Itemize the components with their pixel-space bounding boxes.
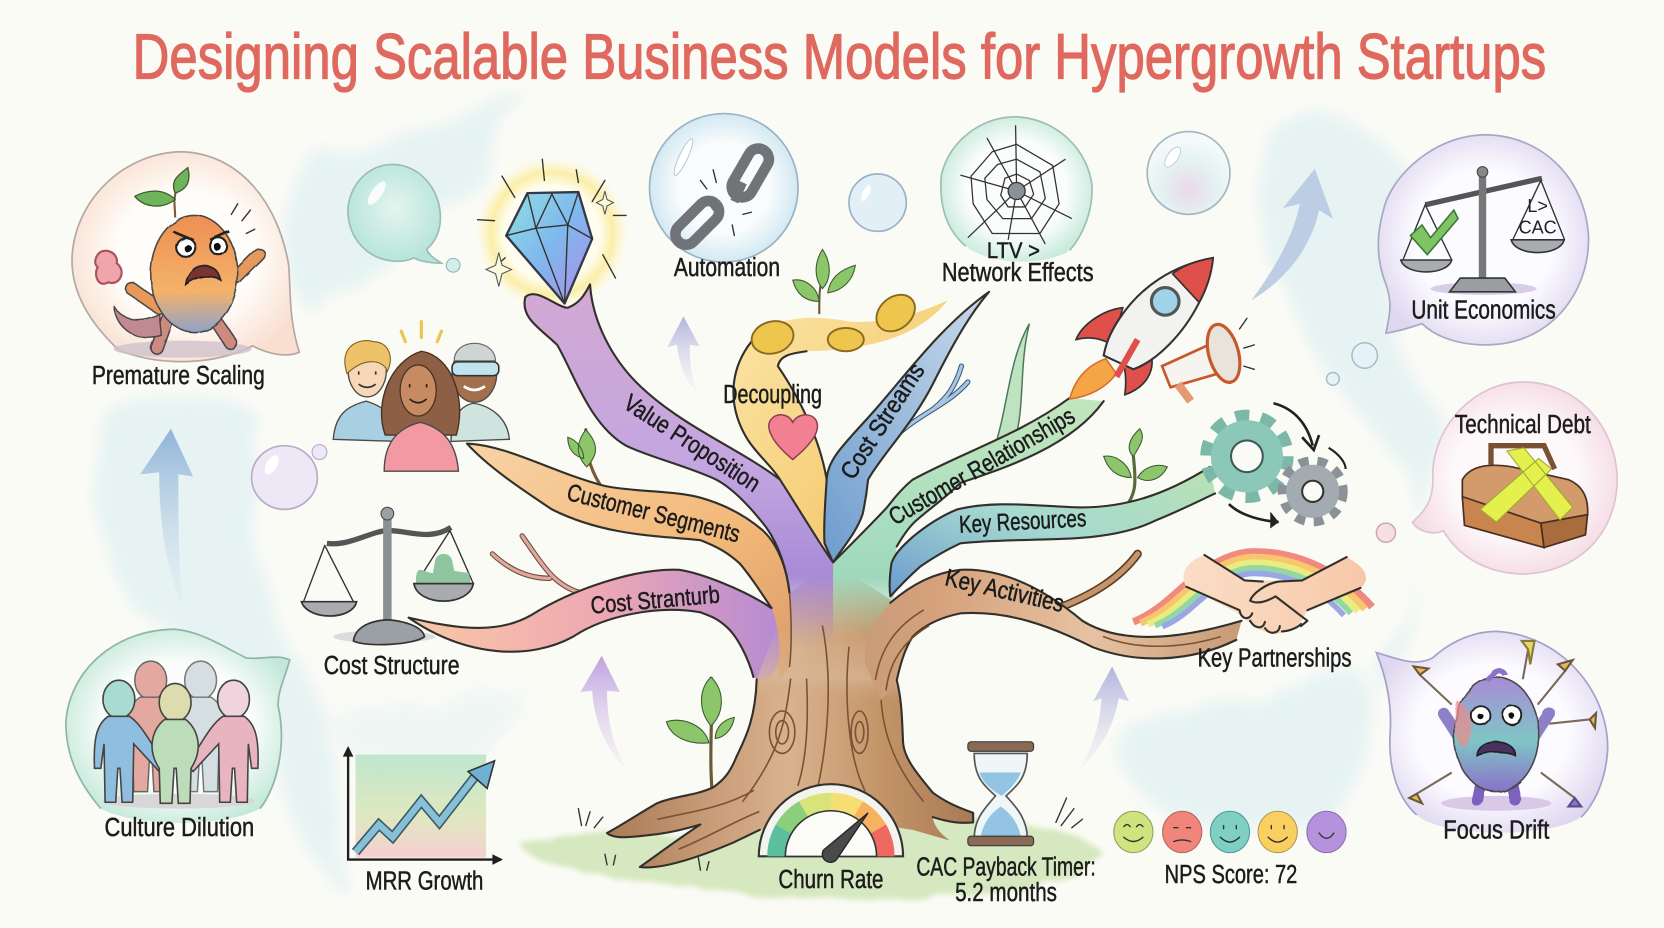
icon: glowing diamond: [475, 157, 628, 310]
break sparks: [700, 170, 751, 236]
speech bubble: premature scaling: [72, 152, 299, 362]
trunk bark lines and knots: [658, 593, 923, 849]
icon: leaf sprout on customer segments: [568, 430, 596, 467]
branch label: Cost Stranturb: Cost Stranturb: [590, 581, 721, 620]
bubble: culture dilution: [66, 629, 290, 823]
branch label: Value Proposition: Value Proposition: [619, 390, 765, 498]
icon: pink pretzel flower: [95, 251, 122, 284]
rainbow: [1133, 552, 1372, 627]
gauge segment dark green: [776, 829, 784, 856]
bubble body: [1376, 631, 1608, 833]
branch label: Customer Segments: Customer Segments: [564, 479, 743, 548]
icon: arrows aimed at monster: [1409, 641, 1596, 806]
yellow glow: [475, 157, 628, 310]
arrow: grey up arrow near automation: [668, 316, 699, 394]
bubble highlight: [671, 137, 696, 177]
rocket flame: [1070, 359, 1116, 399]
gauge segment orange: [858, 809, 878, 829]
person: left man: [333, 341, 399, 441]
figure: back grey person: [173, 661, 228, 792]
label: Cost Structure: Cost Structure: [324, 652, 460, 680]
branch label: Cost Streams: Cost Streams: [836, 358, 930, 484]
label: LTV >: LTV >: [987, 238, 1040, 263]
small thought bubbles right: [1327, 343, 1377, 385]
bubble body: [66, 629, 290, 823]
branch: customer segments orange: [467, 444, 791, 679]
growth arrowhead: [468, 761, 495, 788]
label: Churn Rate: Churn Rate: [778, 866, 883, 894]
rocket window: [1151, 288, 1179, 315]
branch: cost structure pink: [409, 570, 779, 679]
bubble: focus drift: [1376, 631, 1608, 833]
gauge: churn rate: [759, 784, 903, 862]
bubble outline: [72, 152, 299, 362]
NPS smiley faces: [1114, 811, 1346, 853]
bubble highlight: [364, 179, 389, 207]
gauge segment green: [784, 809, 804, 829]
small pink bubble: [1376, 523, 1395, 542]
branch label: Key Activities: Key Activities: [943, 564, 1067, 618]
trunk base: [607, 562, 973, 867]
chart area: [356, 754, 486, 857]
branch label: Key Resources: Key Resources: [958, 505, 1087, 539]
smiley yellow: [1258, 811, 1297, 853]
person: centre woman: [382, 351, 460, 471]
icon: balance scale with check and CAC: [1401, 167, 1564, 295]
rocket body: [1104, 258, 1213, 369]
branch: key resources blue-green: [890, 467, 1215, 596]
icon: megaphone: [1162, 318, 1254, 401]
bubble: technical debt: [1412, 382, 1617, 574]
icon: angry orange monster: [114, 215, 259, 348]
clasped hands fill: [1183, 555, 1366, 634]
label: Focus Drift: Focus Drift: [1443, 816, 1549, 844]
bubble edge: [1376, 631, 1608, 817]
branch: key activities brown: [865, 570, 1242, 700]
bubble body: [941, 117, 1092, 262]
gem facets: [506, 192, 592, 303]
label: 5.2 months: 5.2 months: [955, 879, 1057, 907]
hand outlines and fingers: [1186, 555, 1360, 633]
icon: broken chain: [671, 145, 773, 249]
bubble: unit economics: [1378, 135, 1589, 345]
grey gear: [1283, 462, 1342, 521]
icon: balance scale with check and CAC: L>: [1527, 196, 1548, 216]
rocket nose: [1173, 258, 1213, 302]
smiley purple: [1307, 811, 1346, 853]
sparkles: [486, 191, 613, 287]
figure: front centre green person: [152, 683, 198, 803]
ground: grass: [520, 817, 1104, 902]
gauge segment yellow: [831, 802, 858, 809]
icon: spider web: [960, 125, 1072, 244]
smiley lime: [1114, 811, 1153, 853]
arrow: lavender up arrow: [1076, 666, 1129, 774]
gauge needle: [822, 813, 868, 862]
hourglass caps: [968, 742, 1034, 751]
monster shadow: [114, 341, 252, 358]
sapling: [666, 677, 734, 791]
icon: treasure toolbox with yellow tape: [1462, 446, 1588, 548]
label: Decoupling: Decoupling: [723, 381, 822, 409]
chart: MRR growth: [343, 746, 503, 865]
icon: rocket: [1070, 258, 1213, 399]
arrow: purple up arrow: [581, 656, 629, 774]
branch: cost streams blue: [824, 292, 989, 562]
arrow: upper right growth arrow: [1251, 169, 1333, 300]
label: Automation: Automation: [674, 254, 780, 282]
label: Premature Scaling: Premature Scaling: [92, 362, 265, 390]
monster shadow: [1441, 796, 1551, 811]
bubble: automation: [649, 114, 798, 262]
icon: sprout on golden branch: [793, 249, 855, 314]
tree: [409, 284, 1242, 867]
shadow: [102, 794, 255, 809]
trunk blend into branches: [757, 636, 898, 694]
icon: worried purple monster: [1443, 671, 1549, 800]
rays: [478, 159, 626, 278]
teal gear: [1207, 416, 1287, 497]
bubble: small blue: [849, 174, 906, 231]
grass tufts: [578, 798, 1082, 870]
bubble edge: [941, 117, 1092, 250]
gauge segment lime: [804, 802, 831, 809]
rotation arrows: [1229, 403, 1319, 522]
smiley red: [1163, 811, 1202, 853]
figure: back red person: [123, 661, 178, 792]
smiley teal: [1210, 811, 1250, 853]
label: MRR Growth: MRR Growth: [366, 867, 483, 895]
bubble: iridescent: [1147, 132, 1230, 214]
watercolor background washes: [98, 96, 1447, 902]
attention rays: [401, 322, 441, 342]
figure: front right pink person: [187, 680, 258, 802]
growth line: [356, 775, 477, 852]
branch twigs: [492, 324, 1138, 607]
icon: three customers: [333, 322, 509, 471]
motion lines: [231, 204, 255, 233]
person: right man with goggles: [451, 343, 509, 441]
label: NPS Score: NPS Score: 72: [1165, 861, 1297, 889]
branch: value proposition purple: [524, 284, 833, 647]
bubble: teal speech bubble: [348, 164, 460, 272]
axes: [348, 748, 501, 860]
branch: decoupling golden: [733, 300, 948, 562]
rocket centre fin: [1116, 340, 1138, 377]
icon: heart: [769, 415, 817, 459]
bubble: lilac speech bubble left: [252, 445, 327, 509]
gauge outer arc and white centre: [759, 784, 903, 856]
icon: gears: [1207, 403, 1346, 528]
rocket fins: [1076, 308, 1152, 395]
figure: front blue person: [94, 680, 166, 802]
label: Network Effects: Network Effects: [942, 259, 1094, 287]
icon: gold coins: [748, 287, 922, 358]
gauge segment red: [878, 829, 886, 856]
arrow: left up arrow: [140, 429, 193, 608]
label: CAC Payback Timer: CAC Payback Timer:: [916, 853, 1096, 881]
icon: balance scale with check and CAC: CAC: [1519, 217, 1557, 237]
icon: balance scale cost structure: [301, 507, 473, 645]
diamond gem: [506, 192, 592, 303]
label: Technical Debt: Technical Debt: [1455, 411, 1591, 439]
bubble edge: [66, 629, 290, 809]
hourglass glass: [974, 753, 1027, 838]
icon: leaf sprout on key resources: [1104, 429, 1167, 480]
branch: customer relationships green: [833, 398, 1104, 637]
small bubble: [446, 258, 460, 272]
label: Culture Dilution: Culture Dilution: [105, 814, 254, 842]
icon: rainbow and handshake: [1133, 552, 1372, 634]
branch label: Customer Relationships: Customer Relationships: [884, 403, 1080, 531]
hourglass sand: [980, 773, 1021, 836]
label: Unit Economics: Unit Economics: [1411, 296, 1556, 324]
label: Key Partnerships: Key Partnerships: [1198, 644, 1351, 672]
trunk edges: [607, 679, 973, 867]
icon: hourglass: [968, 742, 1034, 846]
icon: sprout on monster: [135, 168, 189, 218]
gauge centre: [785, 811, 877, 856]
bubble: network effects: [941, 117, 1092, 262]
